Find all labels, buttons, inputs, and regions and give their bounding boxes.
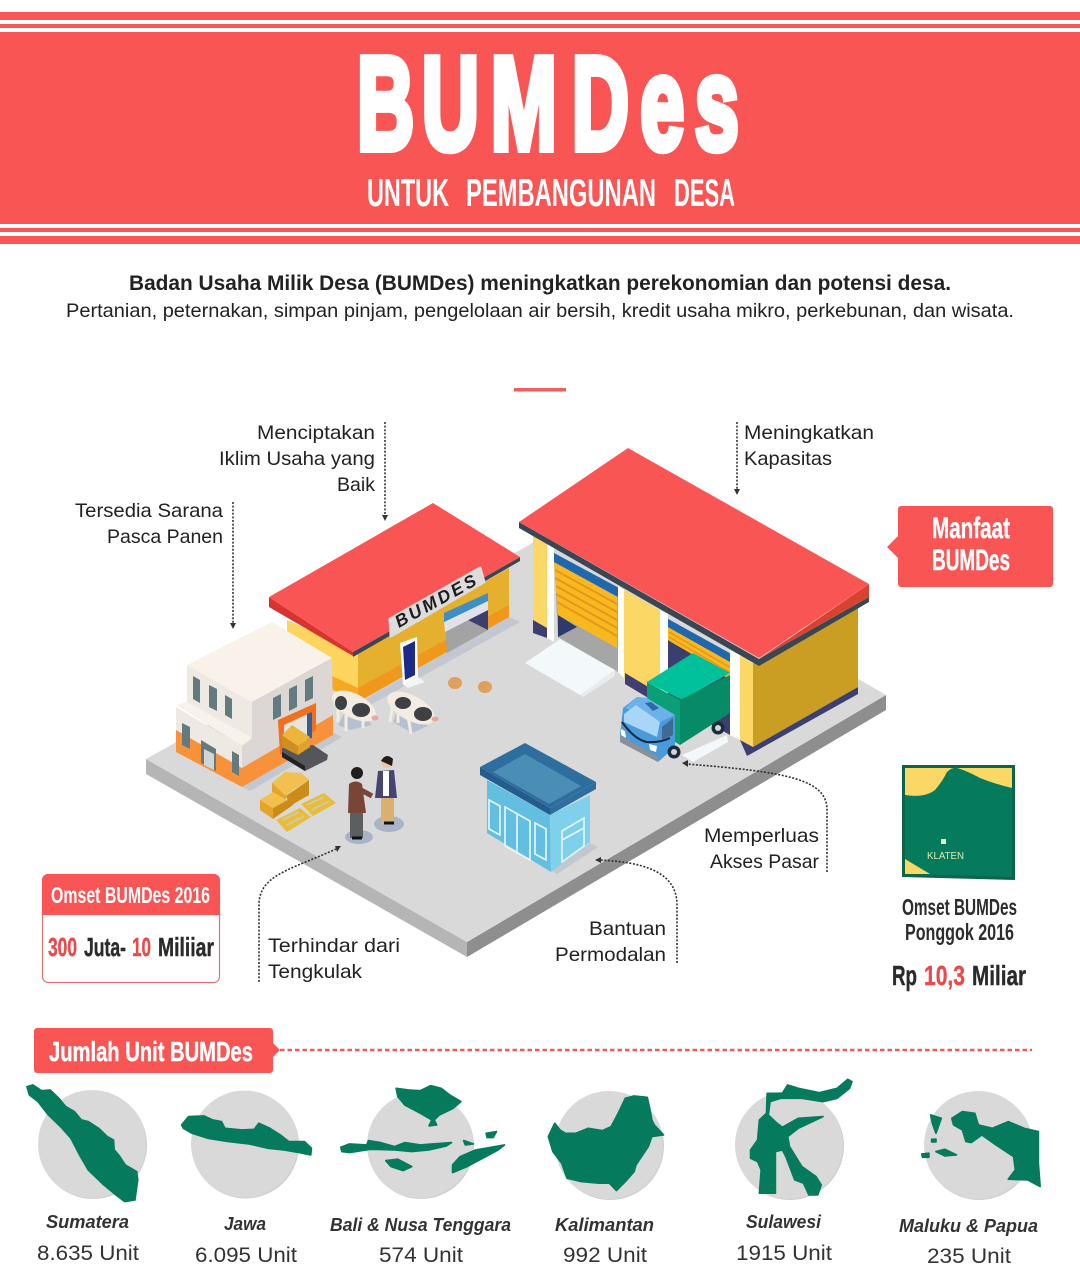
stat: Omset BUMDes Ponggok: Ponggok 2016 [905,919,1014,945]
heading: Jumlah Unit BUMDes [34,1028,1032,1073]
door: right shutter [668,619,733,735]
region: Kalimantan: 992 Unit [563,1244,647,1267]
door [201,740,216,771]
stat: Omset BUMDes Ponggok [892,894,1026,991]
label: Memperluas Akses Pasar: Akses Pasar [710,851,819,873]
label: Meningkatkan Kapasitas [734,422,874,495]
loading bay [278,703,328,771]
region: Jawa: 6.095 Unit [195,1244,297,1267]
subtitle: PEMBANGUNAN [466,172,656,215]
region: Maluku and Papua: Maluku & Papua [899,1216,1038,1236]
callout: Manfaat BUMDes: BUMDes [932,544,1010,577]
label: Memperluas Akses Pasar [682,760,827,873]
stat: Omset BUMDes Ponggok: Miliar [972,960,1026,991]
stat: Omset BUMDes Ponggok: 10,3 [924,960,965,991]
shop window [444,593,488,653]
panel: Omset BUMDes 2016: 300 [48,932,77,962]
label: Menciptakan Iklim Usaha yang Baik [219,422,388,521]
region: Bali and Nusa Tenggara [330,1086,511,1267]
region: Sulawesi: 1915 Unit [736,1242,832,1265]
roof: warehouse [519,448,869,666]
region: Sumatera: 8.635 Unit [37,1242,139,1265]
subtitle [367,172,735,215]
people shaking hands [345,756,404,844]
subtitle: DESA [674,172,735,215]
panel: Omset BUMDes 2016: Omset BUMDes 2016 [51,882,210,908]
region: Kalimantan: Kalimantan [555,1215,654,1235]
label: Bantuan Permodalan [555,857,677,966]
label: Bantuan Permodalan: Bantuan [589,918,666,940]
boxes and pallets [260,772,336,832]
map: Klaten [902,765,1015,880]
panel: Omset BUMDes 2016: Juta- [84,932,126,962]
label: Menciptakan Iklim Usaha yang Baik: Baik [337,474,375,496]
building: white warehouse [176,622,342,791]
isometric village scene [146,448,886,957]
label: Tersedia Sarana Pasca Panen [75,500,236,629]
sign: BUMDES: BUMDES [391,570,480,631]
intro text: Badan Usaha Milik Desa (BUMDes) meningkatkan perekonomian dan potensi desa. [129,272,951,295]
header banner [0,12,1080,244]
stat: Omset BUMDes Ponggok: Omset BUMDes [902,894,1017,920]
label: Meningkatkan Kapasitas: Meningkatkan [744,422,874,444]
region: Maluku and Papua [899,1091,1040,1268]
stat: Omset BUMDes Ponggok: Rp [892,960,917,991]
region: Jawa [182,1090,311,1267]
label: Terhindar dari Tengkulak: Tengkulak [268,961,362,983]
label: Menciptakan Iklim Usaha yang Baik: Menciptakan [257,422,375,444]
map: Klaten: KLATEN [927,850,964,862]
roof: shop [269,503,520,657]
region: Sulawesi [735,1079,852,1265]
shop door [400,637,425,688]
kiosk [480,743,598,874]
icon: truck [620,653,730,762]
heading: Jumlah Unit BUMDes: Jumlah Unit BUMDes [49,1036,253,1067]
region: Sulawesi: Sulawesi [746,1212,822,1232]
region: Kalimantan [548,1091,664,1267]
region: Sumatera: Sumatera [46,1212,129,1232]
callout: Manfaat BUMDes [887,506,1053,587]
label: Meningkatkan Kapasitas: Kapasitas [744,448,832,470]
callout: Manfaat BUMDes: Manfaat [932,512,1010,545]
intro text [66,272,1014,322]
building: warehouse [519,448,869,756]
panel: Omset BUMDes 2016: 10 [132,932,151,962]
label: Tersedia Sarana Pasca Panen: Pasca Panen [107,526,223,548]
door: left shutter [525,553,619,697]
title: BUMDes [357,30,739,178]
intro text: Pertanian, peternakan, simpan pinjam, pengelolaan air bersih, kredit usaha mikro, perkebunan, dan wisata. [66,300,1014,322]
label: Tersedia Sarana Pasca Panen: Tersedia Sarana [75,500,223,522]
subtitle: UNTUK [367,172,449,215]
windows [182,676,313,776]
label: Terhindar dari Tengkulak [259,846,400,983]
panel: Omset BUMDes 2016 [42,874,220,982]
building: BUMDES shop [269,503,520,708]
chickens [448,677,492,693]
region: Bali and Nusa Tenggara: Bali & Nusa Tenggara [330,1215,511,1235]
region: Sumatera [27,1085,147,1265]
label: Bantuan Permodalan: Permodalan [555,944,666,966]
panel: Omset BUMDes 2016: Miliiar [158,932,214,962]
region: Jawa: Jawa [224,1214,266,1234]
label: Memperluas Akses Pasar: Memperluas [704,825,819,847]
region: Bali and Nusa Tenggara: 574 Unit [379,1244,463,1267]
label: Terhindar dari Tengkulak: Terhindar dari [268,935,400,957]
cows [327,684,440,734]
platform [146,517,886,957]
label: Menciptakan Iklim Usaha yang Baik: Iklim Usaha yang [219,448,375,470]
region: Maluku and Papua: 235 Unit [927,1245,1011,1268]
